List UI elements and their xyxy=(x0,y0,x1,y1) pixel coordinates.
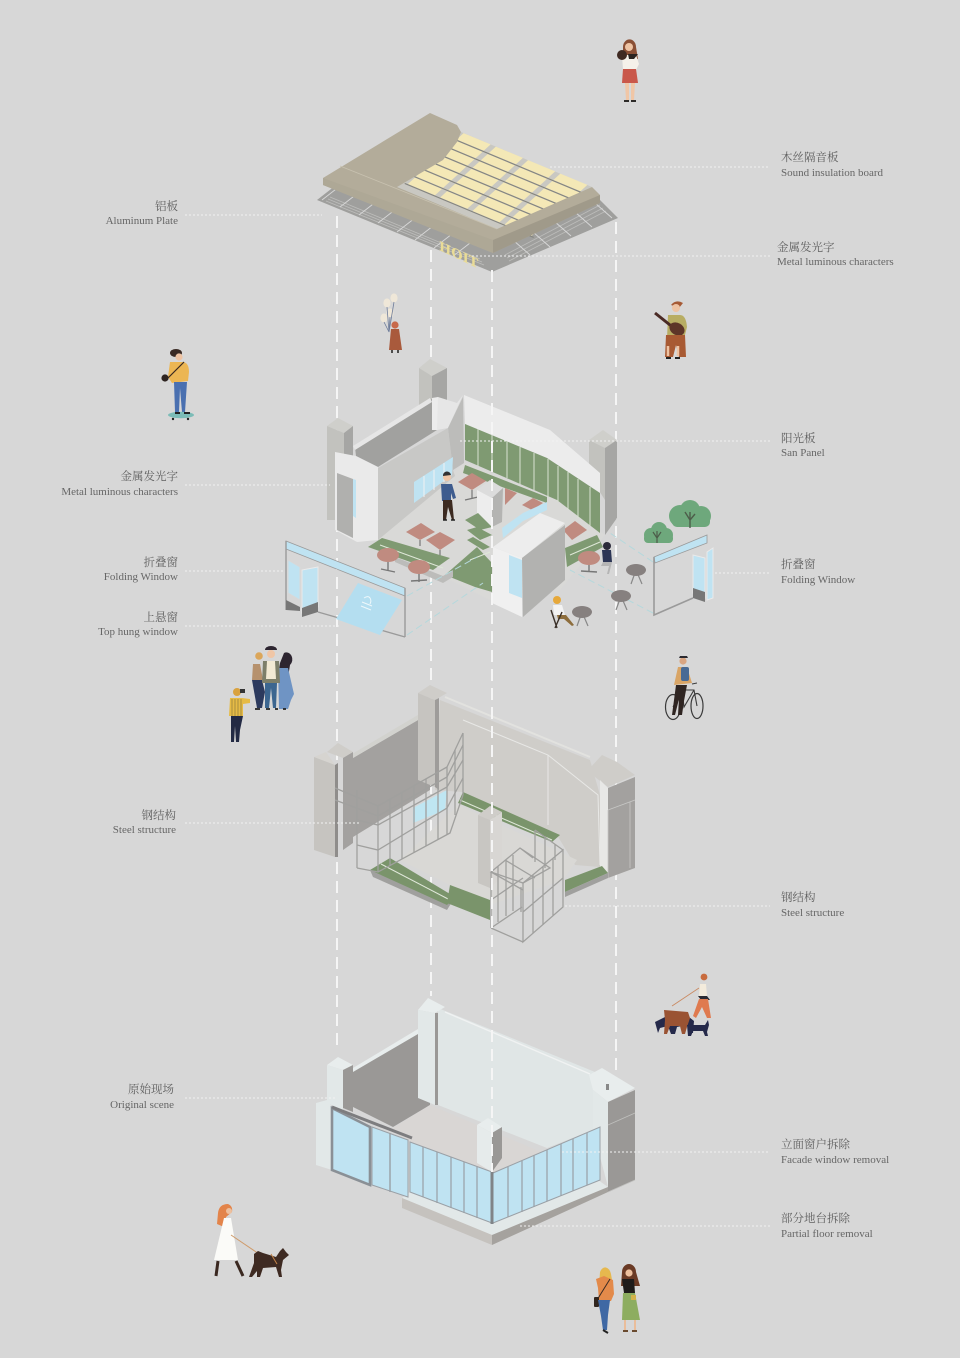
label: original scene: 原始现场 xyxy=(128,1082,174,1096)
table group: pink square tables xyxy=(406,473,587,556)
label: steel structure left: 钢结构 xyxy=(142,808,176,822)
roof interior yellow insulation boards xyxy=(397,132,592,238)
label: top hung window: 上悬窗 xyxy=(144,610,178,624)
white left block with door xyxy=(335,452,378,542)
top hung window xyxy=(336,583,402,635)
left wall dark xyxy=(353,713,430,837)
label: aluminium plate xyxy=(106,199,322,227)
round cafe tables xyxy=(377,548,600,582)
central column xyxy=(477,480,503,527)
label: san panel: 阳光板 xyxy=(781,431,816,445)
label: steel structure left: Steel structure xyxy=(113,824,176,836)
back wall upper panel xyxy=(464,395,600,493)
louvre soffit xyxy=(317,182,618,272)
steel frame left xyxy=(335,733,463,872)
curved blue glass xyxy=(502,502,547,538)
label: top hung window: Top hung window xyxy=(98,626,178,638)
left wall xyxy=(353,1027,430,1127)
label: steel structure right xyxy=(565,890,844,919)
person: photographer xyxy=(229,688,250,742)
label: metal luminous characters left: 金属发光字 xyxy=(120,469,178,483)
floor xyxy=(390,1105,560,1190)
green back bench xyxy=(463,465,547,503)
roof aluminium plate xyxy=(323,113,600,253)
label: top hung window xyxy=(98,610,340,638)
label: metal luminous characters roof: Metal luminous characters xyxy=(777,256,894,268)
label: metal luminous characters roof xyxy=(472,240,894,268)
front white box xyxy=(492,513,565,617)
person: dog walker xyxy=(655,974,711,1036)
right column xyxy=(590,755,635,878)
label: aluminium plate: Aluminum Plate xyxy=(106,215,178,227)
wing wall xyxy=(437,395,464,470)
layer: fit-out with furniture xyxy=(286,359,713,637)
glazing xyxy=(332,1107,600,1224)
left folding window xyxy=(286,541,405,637)
person: skateboarder xyxy=(161,349,194,420)
label: partial floor removal: Partial floor removal xyxy=(781,1228,873,1240)
label: folding window right: Folding Window xyxy=(781,574,855,586)
layer: steel structure xyxy=(314,685,635,942)
label: original scene: Original scene xyxy=(110,1099,174,1111)
person: couple group posing xyxy=(252,646,294,709)
dashed vertical alignment lines xyxy=(337,216,616,1078)
label: partial floor removal xyxy=(520,1211,873,1240)
layer: original scene xyxy=(316,998,635,1245)
floor xyxy=(378,462,605,600)
label: folding window right xyxy=(715,557,855,586)
trees xyxy=(644,500,711,543)
person: man with cup xyxy=(441,471,456,520)
label: facade window removal: Facade window removal xyxy=(781,1154,889,1166)
person: girl with balloons xyxy=(380,293,402,353)
label: sound insulation board: Sound insulation board xyxy=(781,167,884,179)
person: seated woman xyxy=(601,542,612,574)
label: metal luminous characters left: Metal luminous characters xyxy=(61,486,178,498)
label: san panel xyxy=(460,431,825,459)
back wall xyxy=(438,1008,595,1148)
grey outdoor tables xyxy=(572,564,646,626)
columns xyxy=(316,998,502,1172)
green floor steps xyxy=(465,513,492,550)
label: facade window removal xyxy=(562,1137,889,1166)
label: folding window left: 折叠窗 xyxy=(144,555,178,569)
centre column xyxy=(478,806,502,888)
plinth xyxy=(402,1180,608,1245)
label: folding window left xyxy=(104,555,285,583)
label: sound insulation board xyxy=(550,150,884,179)
label: aluminium plate: 铝板 xyxy=(155,199,178,213)
person: woman in white with dog xyxy=(214,1204,289,1277)
label: san panel: San Panel xyxy=(781,447,825,459)
person: seated guitarist xyxy=(551,596,574,628)
dashed blue projection lines xyxy=(407,533,653,635)
dashed centre line xyxy=(491,270,493,1172)
back wall xyxy=(435,700,600,867)
main interior wall xyxy=(378,428,455,540)
label: sound insulation board: 木丝隔音板 xyxy=(781,150,839,164)
person: cyclist with bike xyxy=(666,656,703,720)
label: partial floor removal: 部分地台拆除 xyxy=(781,1211,850,1225)
person: women couple bottom xyxy=(594,1264,640,1333)
rear columns xyxy=(327,359,617,535)
label: metal luminous characters left xyxy=(61,469,330,498)
label: folding window right: 折叠窗 xyxy=(781,557,816,571)
green planters xyxy=(370,792,608,920)
San panel green glazing xyxy=(465,424,600,533)
window with posters xyxy=(414,457,453,503)
roof layer xyxy=(317,113,618,273)
label: steel structure right: Steel structure xyxy=(781,907,844,919)
label: metal luminous characters roof: 金属发光字 xyxy=(777,240,835,254)
right folding window xyxy=(654,535,713,615)
person: guitarist xyxy=(655,301,687,358)
label: folding window left: Folding Window xyxy=(104,571,178,583)
label: original scene xyxy=(110,1082,335,1111)
label: steel structure left xyxy=(113,808,360,836)
left dark wall xyxy=(353,397,438,467)
label: steel structure right: 钢结构 xyxy=(781,890,816,904)
label: facade window removal: 立面窗户拆除 xyxy=(781,1137,850,1151)
column group xyxy=(314,685,447,857)
right end column xyxy=(589,1068,635,1192)
metal luminous HOIT sign: HOIT xyxy=(439,239,479,273)
person: woman holding dog, top xyxy=(617,39,639,101)
blue glass xyxy=(413,790,447,823)
floor xyxy=(400,805,577,905)
green front strips xyxy=(368,535,603,592)
steel frame right xyxy=(491,830,563,942)
